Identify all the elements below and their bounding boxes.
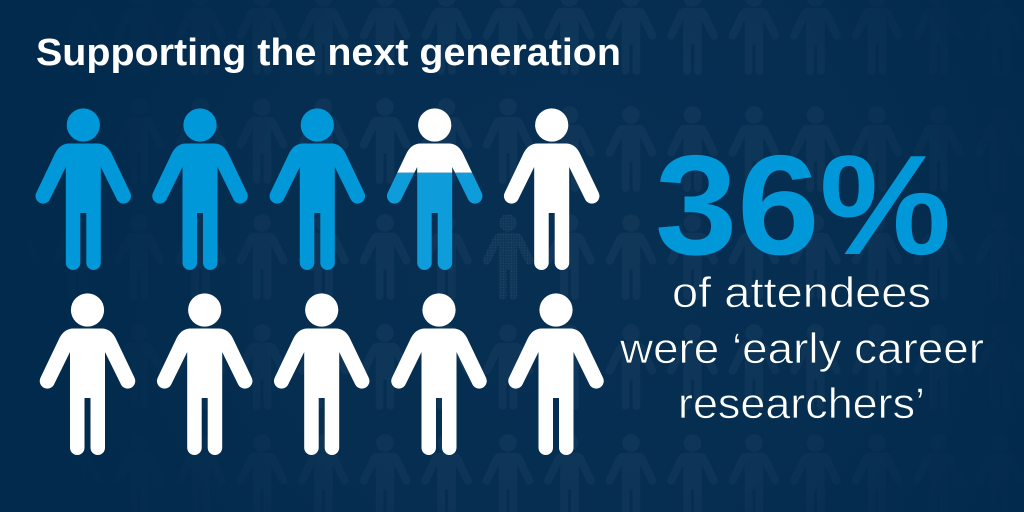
- person 6: white: [40, 293, 135, 455]
- person 4: partly filled: [387, 108, 482, 270]
- person 3: blue: [270, 108, 365, 270]
- caption line 1: of attendees: [672, 269, 931, 317]
- dotted faint person: [483, 214, 533, 300]
- pictogram: ten people, 36% filled: [36, 108, 604, 455]
- person 7: white: [157, 293, 252, 455]
- statistic caption: [619, 269, 984, 428]
- caption line 2: were ‘early career: [619, 325, 984, 373]
- person 5: white: [504, 108, 599, 270]
- person 2: blue: [152, 108, 248, 270]
- person 10: white: [508, 293, 604, 455]
- person 8: white: [274, 293, 369, 455]
- person 1: blue: [36, 108, 131, 270]
- big statistic: 36%: [655, 126, 951, 285]
- caption line 3: researchers’: [678, 380, 925, 428]
- person 9: white: [391, 293, 487, 455]
- title: Supporting the next generation: [36, 32, 621, 74]
